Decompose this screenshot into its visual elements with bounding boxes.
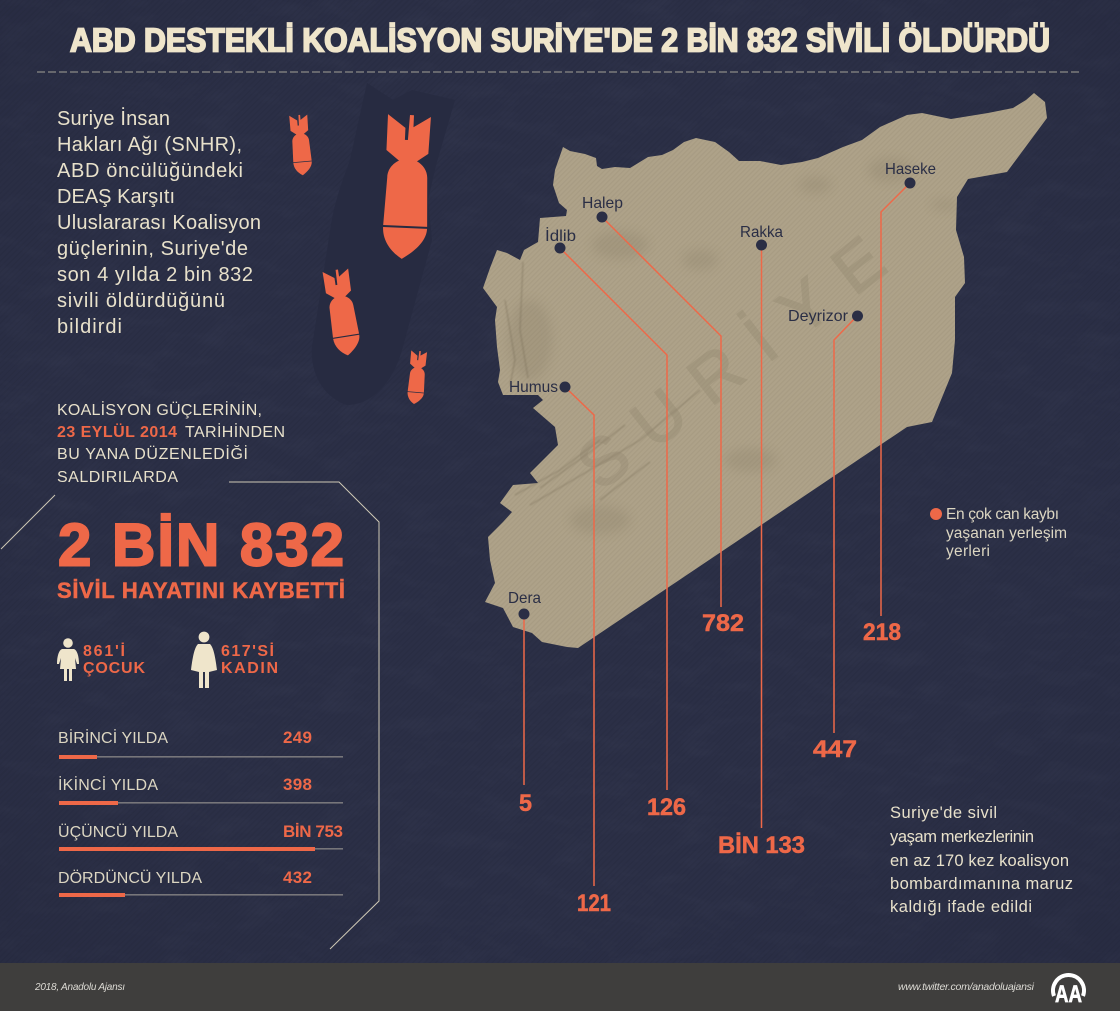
- intro text block: sivili öldürdüğünü: [57, 290, 225, 312]
- bar: first year: [58, 728, 343, 759]
- map of Syria: [483, 93, 1047, 648]
- intro text block: güçlerinin, Suriye'de: [57, 238, 248, 260]
- city: Rakka: [740, 224, 783, 250]
- title: ABD DESTEKLİ KOALİSYON SURİYE'DE 2 BİN 832 SİVİLİ ÖLDÜRDÜ: [70, 22, 1050, 58]
- city: Idlib: [545, 226, 576, 254]
- city: Humus: Humus: [509, 379, 558, 396]
- text: bombardment note: yaşam merkezlerinin: [890, 828, 1034, 846]
- legend: [930, 506, 1067, 560]
- bar: fourth year: [58, 868, 343, 897]
- stat: women: [191, 632, 278, 688]
- icon: bomb 3: [323, 268, 362, 357]
- icon: Anadolu Agency logo: [1053, 975, 1084, 1008]
- text: attack date intro: KOALİSYON GÜÇLERİNİN,: [57, 400, 262, 419]
- stat: children: [57, 638, 145, 681]
- text: attack date intro: SALDIRILARDA: [57, 469, 178, 486]
- panel frame: [1, 482, 379, 949]
- intro text block: son 4 yılda 2 bin 832: [57, 264, 253, 286]
- city: Halep: [582, 195, 623, 222]
- stat: women: 617'Sİ: [221, 642, 274, 660]
- watermark: SURİYE: SURİYE: [563, 222, 898, 503]
- city death tolls: 121: [577, 890, 611, 917]
- city death tolls: 782: [702, 610, 744, 637]
- city: Deyrizor: Deyrizor: [788, 308, 849, 325]
- city death tolls: BİN 133: [718, 832, 805, 859]
- city: Haseke: Haseke: [885, 161, 936, 178]
- blotches and ridges: [512, 162, 906, 530]
- bar: first year: BİRİNCİ YILDA: [58, 728, 168, 747]
- text: attack date intro: TARİHİNDEN: [185, 422, 285, 441]
- text: bombardment note: bombardımanına maruz: [890, 875, 1073, 893]
- city death tolls: 126: [647, 794, 686, 821]
- icon: Anadolu Agency logo: AA: [1055, 981, 1082, 1008]
- city: Idlib: İdlib: [545, 226, 576, 245]
- city death tolls: 447: [813, 736, 857, 763]
- city: Haseke: [885, 161, 936, 188]
- footer bar: www.twitter.com/anadoluajansi: [898, 981, 1035, 993]
- icon: bomb 2: [382, 114, 432, 260]
- icon: bomb 1: [289, 114, 313, 176]
- bar: third year: BİN 753: [283, 822, 343, 841]
- icon: bomb 4: [407, 350, 427, 405]
- intro text block: bildirdi: [57, 316, 122, 338]
- bar: third year: ÜÇÜNCÜ YILDA: [58, 823, 178, 841]
- icon: child: [57, 638, 79, 681]
- city: Dera: [508, 590, 541, 620]
- legend: yerleri: [946, 543, 990, 560]
- city markers: [508, 161, 936, 620]
- stat: children: 861'İ: [83, 642, 125, 660]
- intro text block: [57, 107, 261, 338]
- headline caption: SİVİL HAYATINI KAYBETTİ: [57, 578, 345, 603]
- bar: first year: 249: [283, 728, 312, 747]
- text: bombardment note: kaldığı ifade edildi: [890, 898, 1032, 916]
- footer bar: 2018, Anadolu Ajansı: [34, 982, 125, 993]
- icons: falling bombs: [289, 114, 432, 405]
- intro text block: DEAŞ Karşıtı: [57, 186, 175, 208]
- stat: children: ÇOCUK: [83, 660, 145, 677]
- city death tolls: 5: [519, 790, 532, 817]
- footer bar: [0, 963, 1120, 1011]
- text: attack date intro: [57, 400, 285, 486]
- text: attack date intro: BU YANA DÜZENLEDİĞİ: [57, 444, 248, 463]
- city: Halep: Halep: [582, 195, 623, 212]
- stat: women: KADIN: [221, 660, 278, 677]
- bar chart: deaths per year: [58, 728, 343, 897]
- city death tolls: [519, 610, 901, 917]
- intro text block: Uluslararası Koalisyon: [57, 212, 261, 234]
- bar: third year: [58, 822, 343, 851]
- bar: second year: İKİNCİ YILDA: [58, 775, 158, 794]
- text: bombardment note: Suriye'de sivil: [890, 804, 997, 822]
- icon: large bomb shadow: [312, 83, 455, 405]
- text: attack date intro: 23 EYLÜL 2014: [57, 422, 177, 441]
- headline number: 2 BİN 832: [58, 512, 344, 578]
- leader lines: [524, 183, 910, 886]
- intro text block: Suriye İnsan: [57, 107, 170, 130]
- bar: fourth year: DÖRDÜNCÜ YILDA: [58, 869, 202, 887]
- text: bombardment note: en az 170 kez koalisyon: [890, 852, 1069, 870]
- icon: woman: [191, 632, 217, 688]
- legend: yaşanan yerleşim: [946, 525, 1067, 542]
- bar: second year: 398: [283, 775, 312, 794]
- bar: fourth year: 432: [283, 868, 312, 887]
- bar: second year: [58, 775, 343, 805]
- text: bombardment note: [890, 804, 1073, 916]
- intro text block: Hakları Ağı (SNHR),: [57, 134, 242, 156]
- legend: En çok can kaybı: [946, 506, 1059, 523]
- city: Rakka: Rakka: [740, 224, 783, 241]
- city death tolls: 218: [863, 619, 901, 646]
- city: Dera: Dera: [508, 590, 541, 607]
- intro text block: ABD öncülüğündeki: [57, 160, 243, 182]
